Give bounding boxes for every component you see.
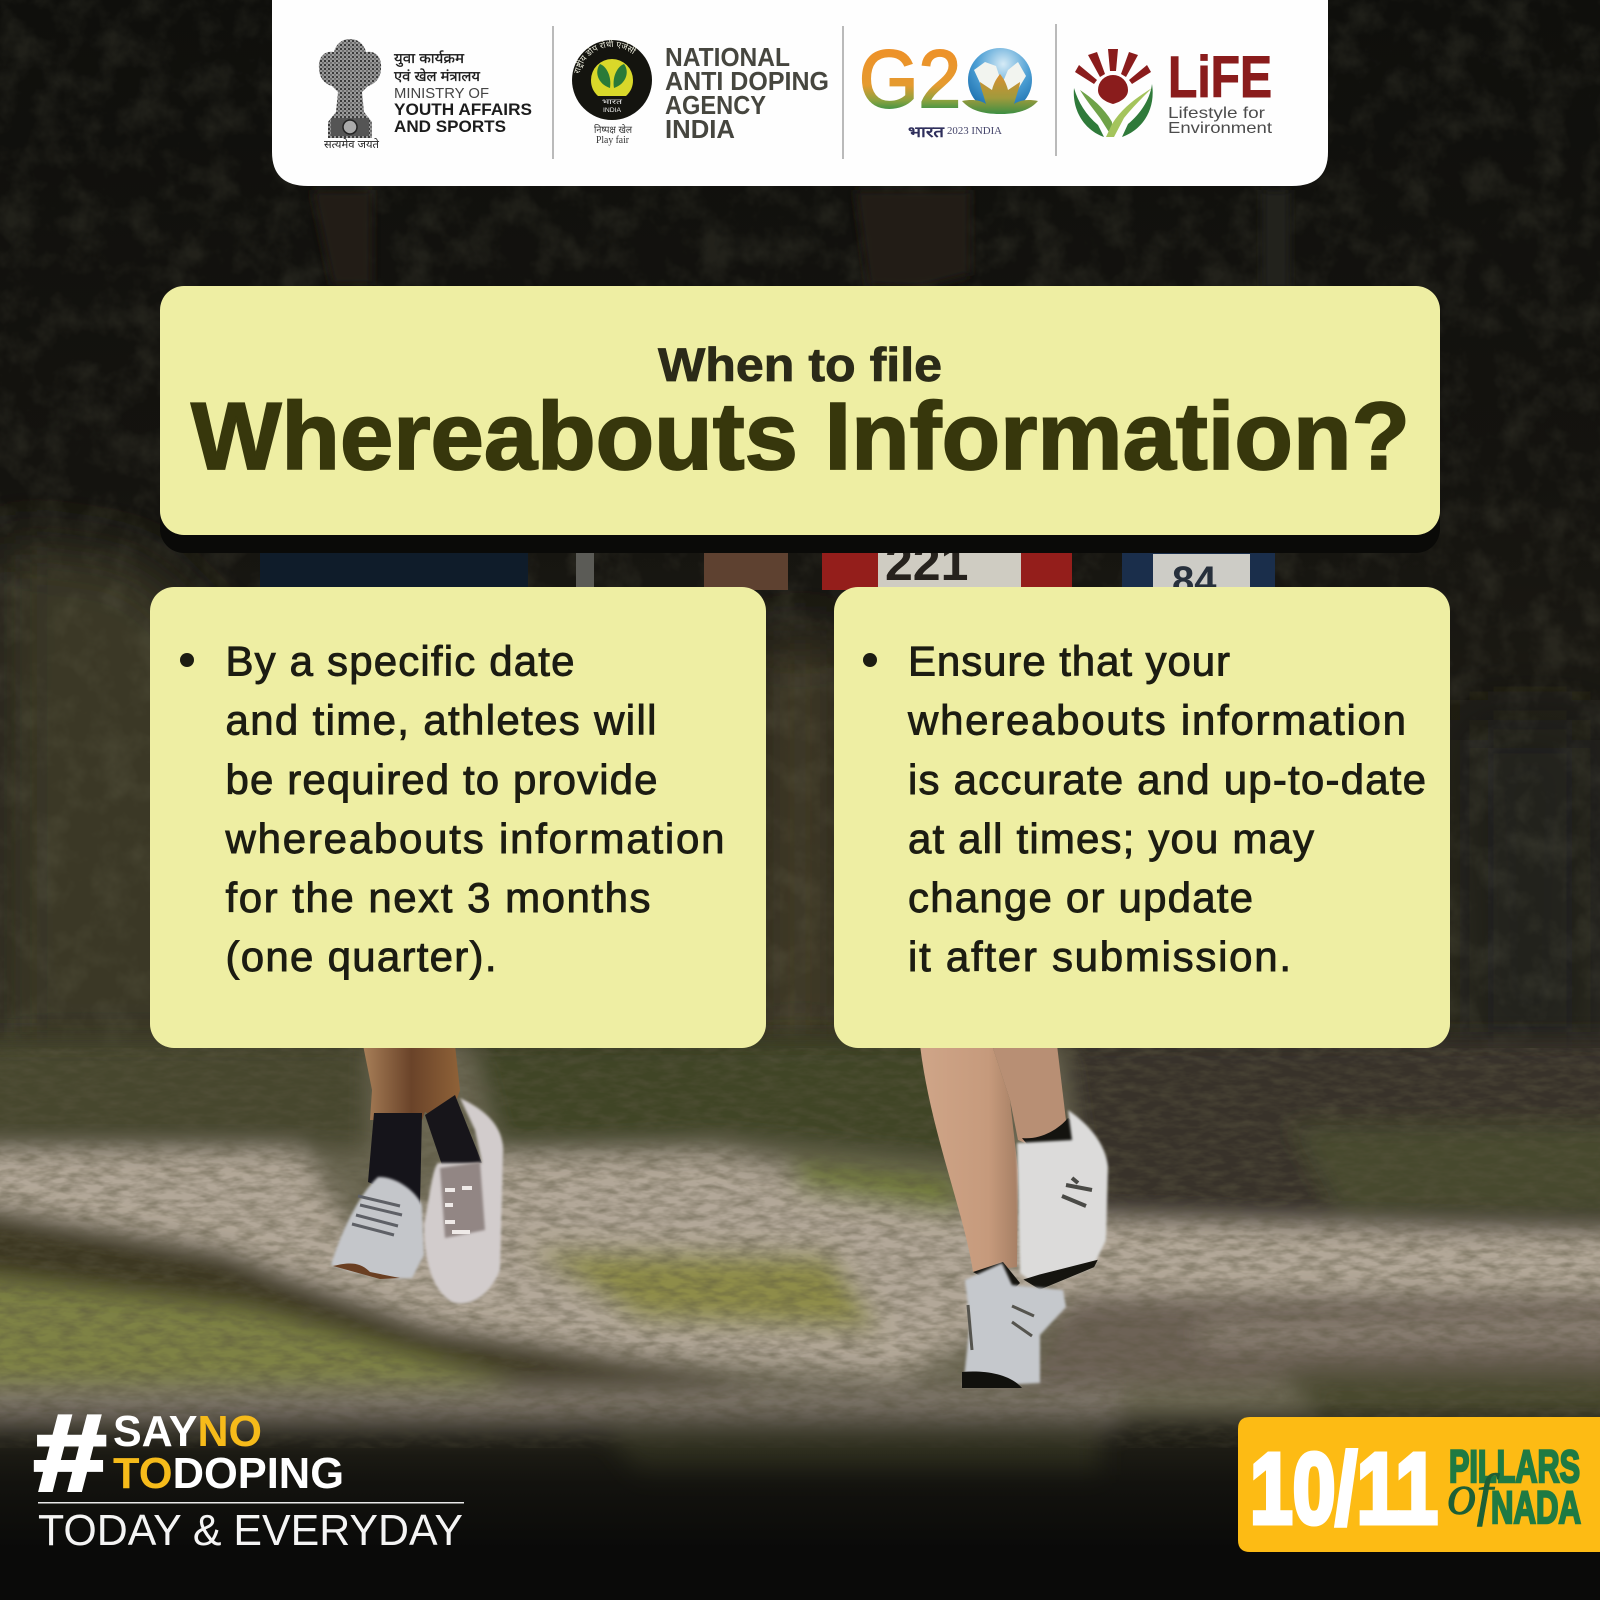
icon: national emblem — [319, 39, 381, 151]
agency name: NATIONAL — [665, 42, 790, 72]
text block: whereabouts information — [224, 815, 724, 862]
icon: NADA seal — [572, 40, 652, 146]
badge: 10/11 Pillars of NADA: of — [1447, 1462, 1500, 1527]
ministry name: YOUTH AFFAIRS — [394, 100, 532, 119]
runner faces — [312, 190, 970, 288]
header logo panel — [272, 0, 1328, 186]
runner jerseys and bibs — [260, 535, 1275, 603]
agency name: AGENCY — [665, 90, 766, 120]
divider lines — [553, 24, 1056, 159]
India 2023 mark: 2023 INDIA — [947, 126, 1002, 137]
ministry name: युवा कार्यक्रम — [394, 50, 465, 67]
text block: it after submission. — [908, 933, 1291, 980]
logo: LiFE: Lifestyle for — [1168, 105, 1266, 122]
agency name: ANTI DOPING — [665, 66, 829, 96]
text block: whereabouts information — [907, 697, 1406, 744]
logo: National Anti Doping Agency India — [572, 40, 829, 146]
agency name — [665, 42, 829, 144]
panel: left note — [150, 587, 766, 1048]
series title — [1449, 1441, 1581, 1533]
text block: is accurate and up-to-date — [908, 756, 1426, 803]
series number: 10/11 — [1250, 1433, 1438, 1545]
text block: be required to provide — [226, 756, 658, 803]
icon: NADA seal: Play fair — [596, 135, 630, 146]
logo: LiFE: Environment — [1168, 120, 1273, 137]
icon: NADA seal: INDIA — [603, 108, 621, 114]
runner jerseys and bibs: 221 — [885, 535, 968, 591]
logo: G20 India: G2 — [859, 34, 961, 125]
runner jerseys and bibs: 84 — [1172, 559, 1217, 603]
text block: Ensure that your — [908, 638, 1230, 684]
badge: 10/11 Pillars of NADA — [1238, 1417, 1600, 1552]
logo: G20 India — [859, 34, 1038, 141]
left runner legs and shoes — [331, 1045, 503, 1303]
India 2023 mark — [908, 124, 1002, 141]
icon: globe — [968, 48, 1032, 112]
campaign hashtag: Say No To Doping — [34, 1392, 464, 1555]
icon: hash mark: # — [34, 1392, 106, 1513]
icon: lotus — [962, 74, 1038, 114]
India 2023 mark: भारत — [908, 124, 946, 141]
tagline: TODAY & EVERYDAY — [38, 1506, 463, 1555]
ministry name: AND SPORTS — [394, 117, 506, 136]
text block: and time, athletes will — [226, 697, 656, 744]
logo: LiFE — [1074, 45, 1273, 137]
tree trunk — [1262, 190, 1290, 290]
ministry name: MINISTRY OF — [394, 85, 489, 102]
text block — [224, 638, 724, 980]
text block: By a specific date — [226, 638, 574, 684]
title panel — [160, 286, 1440, 553]
icon: NADA seal: राष्ट्रीय डोप रोधी एजेंसी — [574, 40, 636, 73]
ministry name — [394, 50, 532, 136]
right runner legs and shoes — [920, 1045, 1108, 1388]
text block — [907, 638, 1426, 980]
heading: main: Whereabouts Information? — [191, 383, 1410, 490]
hashtag line two: TODOPING — [113, 1449, 344, 1498]
icon: national emblem: सत्यमेव जयते — [324, 138, 380, 151]
LiFE wordmark: LiFE — [1168, 45, 1272, 110]
text block: at all times; you may — [908, 815, 1314, 862]
bullet — [180, 653, 194, 667]
panel: right note — [834, 587, 1450, 1048]
ministry name: एवं खेल मंत्रालय — [394, 68, 481, 84]
icon: NADA seal: निष्पक्ष खेल — [594, 124, 632, 136]
forest canopy — [0, 540, 1600, 1060]
icon: sun and leaves — [1074, 49, 1153, 137]
text block: change or update — [908, 874, 1253, 921]
grass and trail — [0, 1040, 1600, 1475]
logo: Ministry of Youth Affairs and Sports — [319, 39, 532, 151]
bullet — [863, 653, 877, 667]
icon: NADA seal: भारत — [602, 99, 623, 106]
heading: kicker: When to file — [658, 338, 942, 391]
text block: for the next 3 months — [226, 874, 650, 921]
text block: (one quarter). — [226, 933, 496, 980]
agency name: INDIA — [665, 114, 735, 144]
hashtag line one: SAYNO — [113, 1407, 262, 1456]
